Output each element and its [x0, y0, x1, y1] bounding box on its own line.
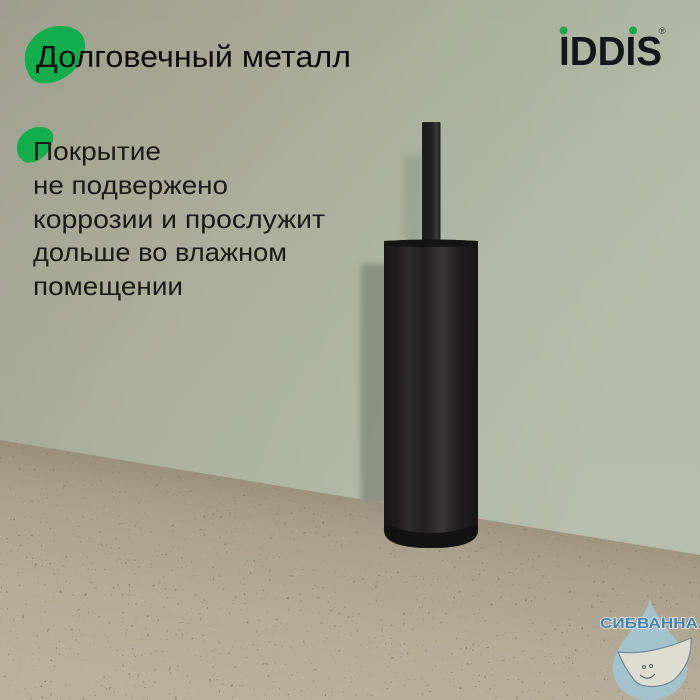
green blob behind body text: [17, 127, 53, 163]
body text: помещении: [33, 271, 183, 301]
product: black metal toilet brush holder: [384, 122, 478, 548]
registered mark: ®: [659, 26, 666, 36]
IDDIS logo: IDDIS: [559, 28, 662, 74]
concrete floor: [0, 430, 700, 700]
lid band: [384, 240, 478, 247]
bathtub: [618, 638, 691, 687]
base ring: [384, 524, 478, 548]
holder cylinder: [384, 240, 478, 548]
body text: дольше во влажном: [33, 237, 287, 267]
heading: Долговечный металл: [36, 39, 351, 74]
product shadow on wall: [361, 155, 422, 504]
body text: не подвержено: [33, 170, 228, 200]
body text: коррозии и прослужит: [33, 204, 325, 234]
brush handle: [422, 122, 440, 244]
Sibvanna watermark: [600, 598, 698, 700]
body text: [33, 136, 325, 301]
green blob behind heading: [25, 26, 85, 83]
bathtub face: [640, 664, 655, 678]
water drop: [613, 598, 687, 700]
wall background: [0, 0, 700, 560]
body text: Покрытие: [33, 136, 161, 166]
logo green dots: [560, 26, 568, 34]
brand name: СИБВАННА: [600, 615, 698, 632]
